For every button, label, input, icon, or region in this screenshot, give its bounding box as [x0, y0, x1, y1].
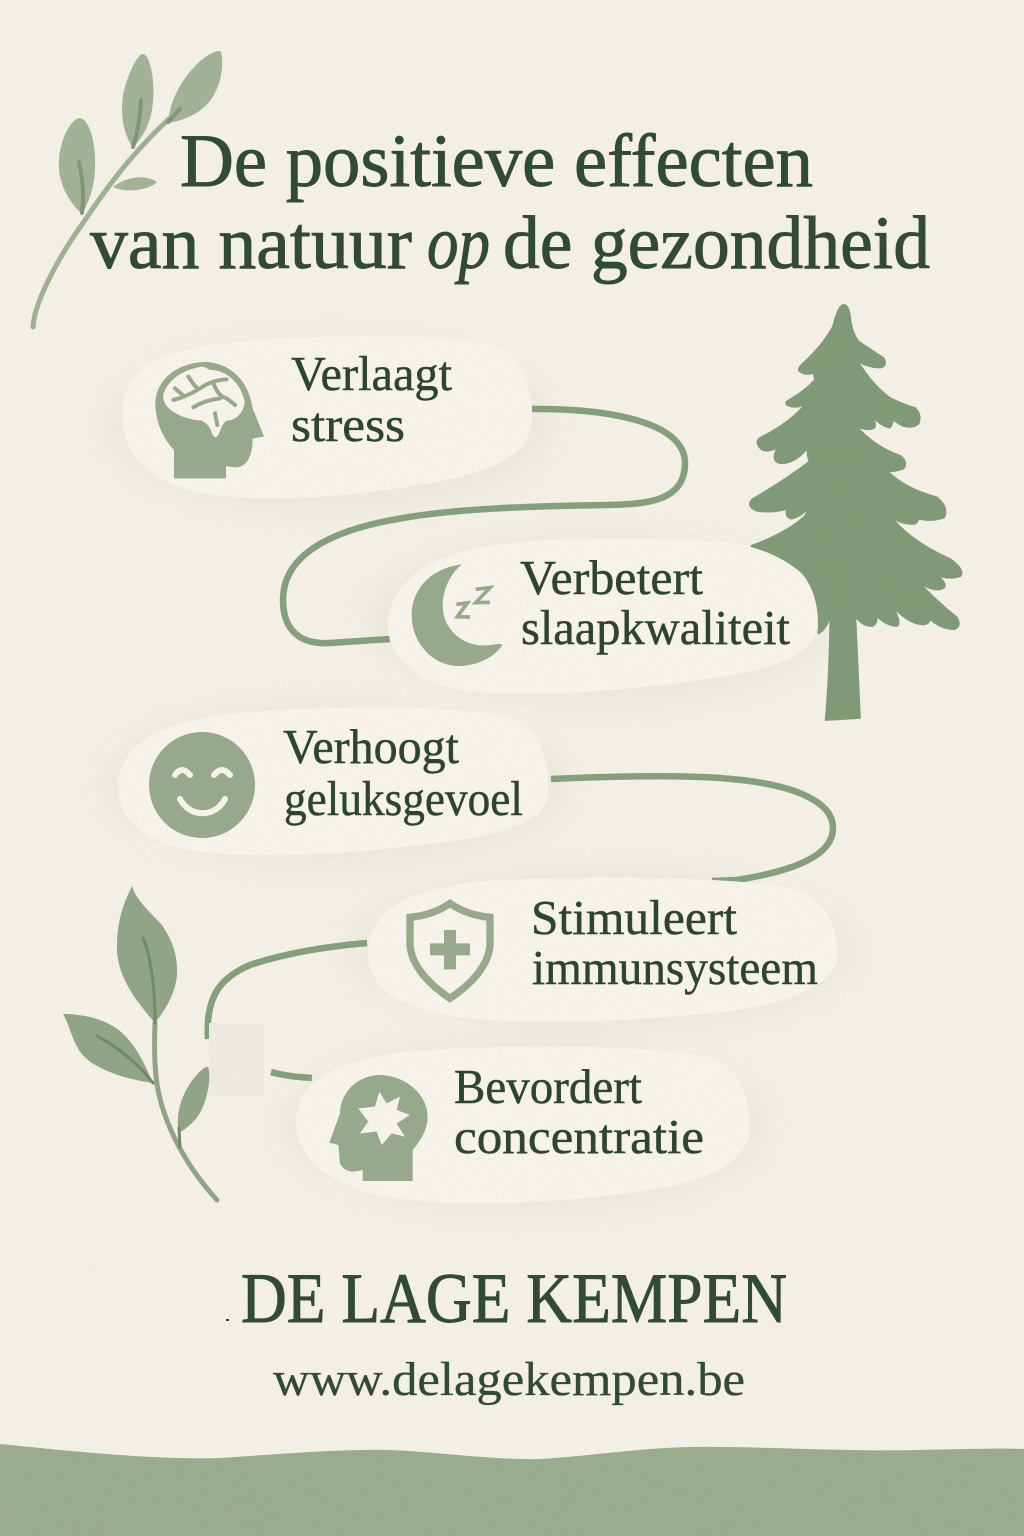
text: verlaagt stress: Verlaagt	[291, 346, 452, 401]
text: bevordert concentratie: Bevordert	[454, 1059, 642, 1114]
text: verlaagt stress: stress	[291, 397, 405, 452]
text: verhoogt geluksgevoel: Verhoogt	[283, 719, 459, 774]
panel: verbetert slaapkwaliteit	[388, 539, 818, 694]
title: van natuur	[90, 202, 412, 285]
panel: verhoogt geluksgevoel	[118, 707, 548, 855]
text: verbetert slaapkwaliteit: slaapkwaliteit	[521, 600, 790, 655]
text: verbetert slaapkwaliteit	[520, 550, 790, 655]
text: stimuleert immunsysteem	[531, 890, 818, 995]
text: stimuleert immunsysteem: immunsysteem	[532, 940, 818, 995]
text: verhoogt geluksgevoel: geluksgevoel	[284, 771, 523, 826]
soft halos behind the pills	[100, 335, 855, 1215]
icon: head with star	[329, 1075, 428, 1181]
brand name: DE LAGE KEMPEN	[241, 1260, 787, 1338]
connector: stress to slaap	[283, 409, 685, 643]
title: op	[427, 202, 490, 285]
text: verlaagt stress	[291, 346, 452, 452]
icon: shield with cross	[410, 903, 490, 998]
text: verbetert slaapkwaliteit: Verbetert	[520, 550, 703, 605]
icon: moon and zz	[412, 564, 502, 666]
title: de gezondheid	[503, 202, 930, 285]
title	[90, 120, 930, 285]
illustration: leaf branch top left	[33, 51, 222, 327]
connector: geluk to immuunsysteem	[551, 776, 833, 881]
text: bevordert concentratie	[454, 1059, 704, 1164]
panel: bevordert concentratie	[296, 1046, 750, 1203]
text: verhoogt geluksgevoel	[283, 719, 523, 826]
text: bevordert concentratie: concentratie	[454, 1109, 704, 1164]
website url: www.delagekempen.be	[273, 1353, 745, 1406]
title: De positieve effecten	[180, 120, 813, 203]
illustration: pine tree	[750, 305, 961, 720]
illustration: leaf branch bottom left	[63, 886, 217, 1200]
panel: stimuleert immuunsysteem	[368, 878, 838, 1022]
text: stimuleert immunsysteem: Stimuleert	[531, 890, 737, 945]
connector: immuunsysteem to concentratie	[208, 943, 367, 1096]
icon: smiling face	[149, 732, 255, 838]
footer wave	[0, 1444, 1024, 1536]
panel: verlaagt stress	[122, 336, 532, 498]
icon: head with brain	[155, 362, 264, 478]
